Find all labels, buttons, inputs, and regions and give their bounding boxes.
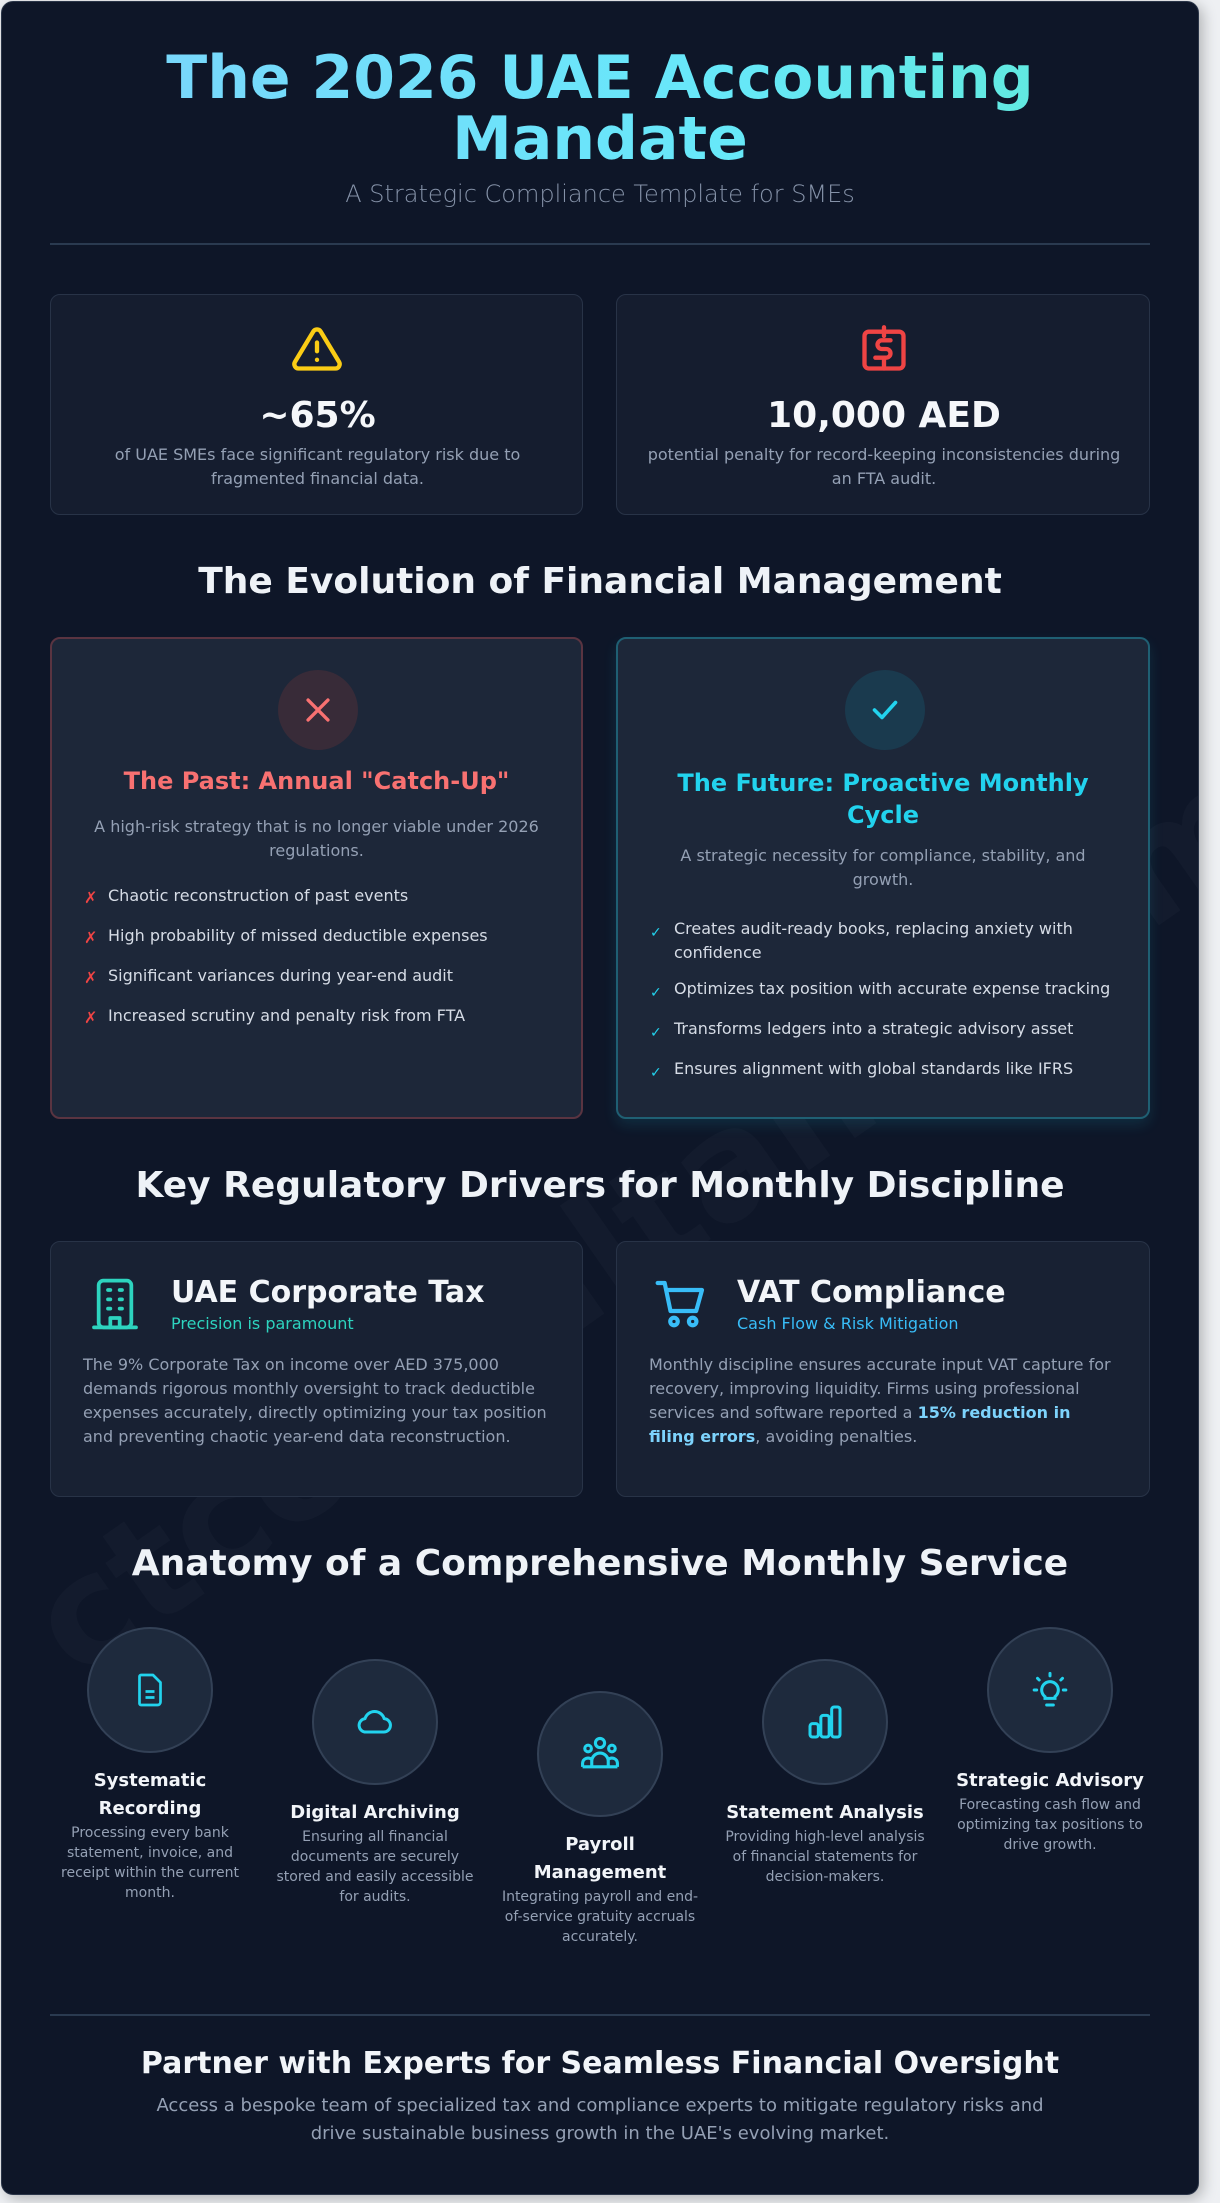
future list: Ensures alignment with global standards like IFRS xyxy=(674,1059,1073,1078)
footer title: Partner with Experts for Seamless Financial Oversight xyxy=(141,2046,1059,2081)
stat number: ~65% xyxy=(259,395,376,436)
past list: Significant variances during year-end audit xyxy=(108,966,453,985)
past list: ✗ xyxy=(84,928,97,947)
heading: anatomy: Anatomy of a Comprehensive Monthly Service xyxy=(132,1543,1068,1584)
future list: Creates audit-ready books, replacing anxiety with confidence xyxy=(674,919,1073,962)
step: statement analysis: Providing high-level analysis of financial statements for decision-makers. xyxy=(725,1829,925,1885)
future list: Transforms ledgers into a strategic advisory asset xyxy=(674,1019,1073,1038)
step: systematic recording: Processing every bank statement, invoice, and receipt within the current month. xyxy=(61,1825,239,1901)
panel: past xyxy=(50,637,583,1119)
step: payroll xyxy=(502,1691,698,1945)
step: strategic advisory: Strategic Advisory xyxy=(956,1770,1144,1791)
step: systematic recording xyxy=(61,1627,239,1901)
stat description: of UAE SMEs face significant regulatory risk due to fragmented financial data. xyxy=(115,445,520,488)
title: VAT Compliance xyxy=(737,1275,1006,1310)
title: Mandate xyxy=(452,104,748,174)
step: statement analysis: Statement Analysis xyxy=(726,1802,924,1823)
body: Monthly discipline ensures accurate input VAT capture for recovery, improving liquidity. Firms using professional services and software reported a 15% reduction in xyxy=(649,1355,1111,1422)
past list xyxy=(84,886,488,1027)
title xyxy=(2,48,1198,170)
future title: The Future: Proactive Monthly Cycle xyxy=(677,769,1089,829)
past list: Increased scrutiny and penalty risk from FTA xyxy=(108,1006,465,1025)
step: digital archiving: Digital Archiving xyxy=(290,1802,460,1823)
step: strategic advisory: Forecasting cash flow and optimizing tax positions to drive growth. xyxy=(957,1797,1143,1853)
step: systematic recording: Recording xyxy=(99,1798,201,1819)
future subtitle: A strategic necessity for compliance, stability, and growth. xyxy=(680,846,1086,889)
icon: warning xyxy=(292,327,342,371)
past list: High probability of missed deductible expenses xyxy=(108,926,488,945)
title: The 2026 UAE Accounting xyxy=(166,43,1034,113)
panel: VAT xyxy=(616,1241,1150,1497)
icon: x xyxy=(278,670,358,750)
footer text: Access a bespoke team of specialized tax and compliance experts to mitigate regulatory risks and drive sustainable business growth in the UAE's evolving market. xyxy=(156,2095,1044,2144)
heading: evolution: The Evolution of Financial Management xyxy=(198,561,1002,602)
stat number: 10,000 AED xyxy=(767,395,1001,436)
panel: future xyxy=(616,637,1150,1119)
past list: ✗ xyxy=(84,1008,97,1027)
subtitle: Precision is paramount xyxy=(171,1314,354,1333)
step: digital archiving: Ensuring all financial documents are securely stored and easily accessible for audits. xyxy=(276,1829,474,1905)
stat card: 65% xyxy=(50,294,583,515)
future list: ✓ xyxy=(650,1025,662,1041)
step: strategic advisory xyxy=(956,1627,1144,1853)
icon: check xyxy=(845,670,925,750)
future list: ✓ xyxy=(650,1065,662,1081)
body: The 9% Corporate Tax on income over AED 375,000 demands rigorous monthly oversight to track deductible expenses accurately, directly optimizing your tax position and preventing chaotic year-end data reconstruction. xyxy=(83,1355,547,1446)
step: payroll: Integrating payroll and end-of-service gratuity accruals accurately. xyxy=(502,1889,698,1945)
icon: cart xyxy=(656,1280,704,1328)
past list: ✗ xyxy=(84,968,97,987)
icon: building xyxy=(92,1278,138,1330)
subtitle: Cash Flow & Risk Mitigation xyxy=(737,1314,959,1333)
step: digital archiving xyxy=(276,1659,474,1905)
step: payroll: Management xyxy=(534,1862,666,1883)
past list: Chaotic reconstruction of past events xyxy=(108,886,408,905)
stat description: potential penalty for record-keeping inconsistencies during an FTA audit. xyxy=(648,445,1120,488)
future list: ✓ xyxy=(650,925,662,941)
step: systematic recording: Systematic xyxy=(94,1770,206,1791)
step: payroll: Payroll xyxy=(565,1834,635,1855)
heading: drivers: Key Regulatory Drivers for Monthly Discipline xyxy=(136,1165,1064,1206)
future list xyxy=(650,919,1110,1081)
subtitle: A Strategic Compliance Template for SMEs xyxy=(345,180,855,208)
future list: ✓ xyxy=(650,985,662,1001)
panel: corporate tax xyxy=(50,1241,583,1497)
title: UAE Corporate Tax xyxy=(171,1275,484,1310)
past title: The Past: Annual "Catch-Up" xyxy=(124,767,509,795)
icon: penalty xyxy=(862,325,906,371)
stat card: penalty xyxy=(616,294,1150,515)
future list: Optimizes tax position with accurate expense tracking xyxy=(674,979,1110,998)
body: filing errors, avoiding penalties. xyxy=(649,1427,917,1446)
past list: ✗ xyxy=(84,888,97,907)
past subtitle: A high-risk strategy that is no longer viable under 2026 regulations. xyxy=(94,817,539,860)
step: statement analysis xyxy=(725,1659,925,1885)
